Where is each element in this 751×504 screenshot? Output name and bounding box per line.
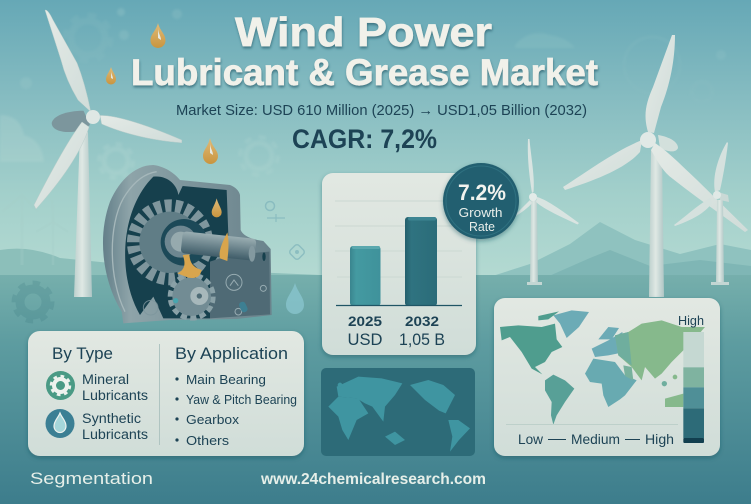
icon: oil drop small — [106, 67, 116, 85]
application list: Main Bearing — [186, 372, 266, 387]
world map — [500, 310, 705, 443]
subtitle: market size: Market Size: USD 610 Million (2025) → USD1,05 Billion (2032) — [176, 102, 587, 119]
icon: mineral gear — [46, 371, 75, 400]
background: distant faint turbines — [2, 195, 68, 265]
gearbox housing — [103, 165, 272, 323]
housing rim highlight — [112, 172, 157, 312]
footer label: segmentation: Segmentation — [30, 469, 153, 488]
growth rate badge — [443, 163, 519, 239]
scale label high: High — [678, 314, 704, 328]
icon: small far-right wind turbine — [674, 142, 729, 285]
CAGR headline: CAGR: 7,2% — [292, 124, 437, 154]
faint floating technical icons — [266, 202, 305, 260]
icon: oil drop top — [150, 23, 166, 48]
background: clouds and faint gears — [0, 8, 726, 178]
icon: large right wind turbine — [563, 35, 748, 297]
bar labels: 1,05 B — [399, 331, 445, 349]
background: sky — [0, 0, 751, 280]
title: Lubricant & Grease Market — [131, 52, 598, 93]
title: Wind Power — [235, 9, 492, 55]
bar labels — [348, 314, 445, 349]
panel: regional heat map — [494, 298, 720, 456]
label: mineral lubricants — [82, 372, 148, 403]
legend: low medium high: Low — [518, 432, 543, 447]
application list — [175, 372, 297, 448]
title — [131, 9, 598, 93]
application list: Gearbox — [186, 412, 240, 427]
legend: low medium high: High — [645, 432, 674, 447]
panel: segmentation — [28, 331, 304, 456]
icon: gearbox cutaway illustration — [103, 165, 272, 323]
background: ground — [0, 275, 751, 504]
bar: 2025 — [350, 246, 380, 306]
footer: website: www.24chemicalresearch.com — [260, 471, 486, 488]
bar labels: USD — [348, 331, 383, 349]
large gear — [134, 206, 207, 278]
output shaft — [181, 231, 257, 261]
label: synthetic lubricants — [82, 411, 148, 442]
icon: oil drop middle — [203, 138, 218, 164]
legend: low medium high — [518, 432, 674, 447]
growth rate badge: Growth — [458, 206, 503, 220]
small gear — [172, 277, 212, 317]
gearbox dark interior — [125, 176, 228, 318]
faint dark gear on ground — [14, 283, 52, 321]
label: mineral lubricants: Mineral — [82, 372, 129, 387]
application list: Yaw & Pitch Bearing — [186, 392, 297, 407]
bar labels: 2032 — [405, 314, 439, 329]
icon: small centre wind turbine — [515, 139, 579, 285]
by type heading: By Type — [52, 344, 113, 363]
grease — [177, 254, 202, 278]
bar: 2032 — [405, 217, 437, 306]
plate gauges — [143, 274, 266, 315]
icon: synthetic drop — [46, 409, 74, 438]
panel: dark world map — [321, 368, 475, 456]
label: synthetic lubricants: Synthetic — [82, 411, 141, 426]
bar labels: 2025 — [348, 314, 383, 329]
by application heading: By Application — [175, 344, 288, 363]
icon: left wind turbine — [34, 10, 182, 297]
label: mineral lubricants: Lubricants — [82, 388, 148, 403]
growth rate badge: Rate — [469, 220, 495, 234]
background: distant hills — [0, 222, 751, 280]
legend: low medium high: Medium — [571, 432, 620, 447]
application list: Others — [186, 433, 230, 448]
icon: pale water drop — [286, 283, 304, 314]
growth rate badge: 7.2% — [458, 180, 506, 205]
colour scale — [683, 332, 704, 443]
lower plate — [210, 252, 270, 318]
label: synthetic lubricants: Lubricants — [82, 427, 148, 442]
panel: bar chart — [322, 173, 476, 355]
